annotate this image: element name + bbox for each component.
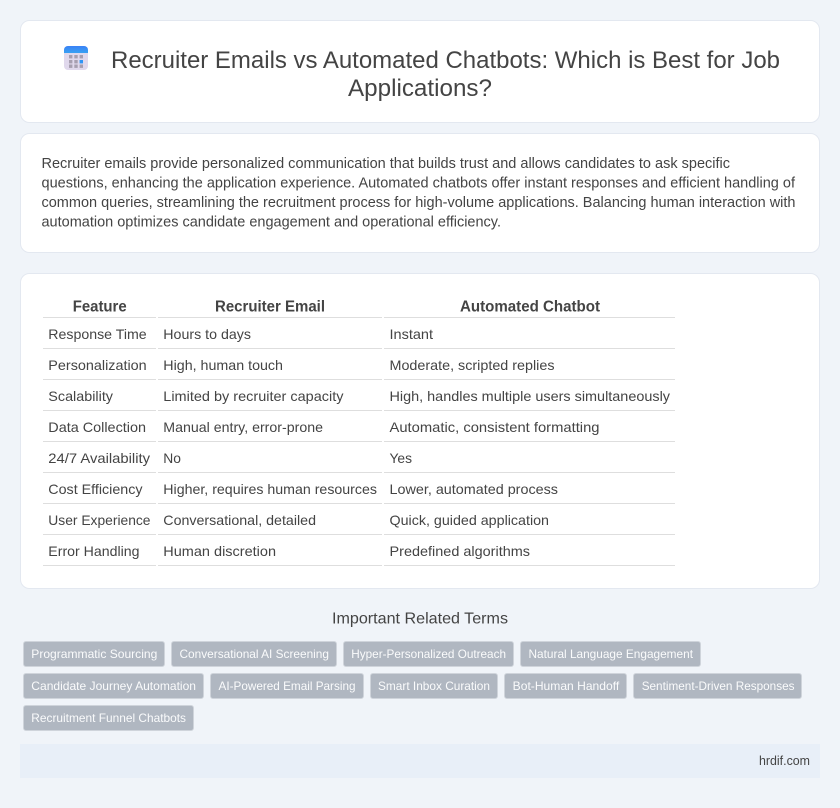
tag bbox=[344, 642, 514, 666]
tag: Conversational AI Screening bbox=[180, 647, 329, 661]
panel: title bbox=[20, 20, 820, 122]
panel: comparison table bbox=[20, 274, 820, 588]
tag: Natural Language Engagement bbox=[528, 647, 694, 661]
tag: Hyper-Personalized Outreach bbox=[351, 647, 506, 661]
panel: introduction text: Recruiter emails provide personalized communication that builds trust and allows candidates to ask specific bbox=[42, 156, 730, 172]
panel: introduction text: automation optimizes candidate engagement and operational efficiency. bbox=[42, 214, 501, 230]
tag bbox=[370, 674, 498, 698]
table header: Feature bbox=[73, 299, 127, 316]
row: personalization bbox=[48, 357, 555, 373]
row: data collection: Automatic, consistent formatting bbox=[390, 419, 600, 435]
row: cost efficiency: Cost Efficiency bbox=[48, 481, 142, 497]
tag bbox=[210, 674, 364, 698]
tag bbox=[24, 706, 194, 730]
row: error handling: Predefined algorithms bbox=[390, 543, 530, 559]
row: scalability: High, handles multiple users simultaneously bbox=[390, 388, 670, 404]
tag bbox=[520, 642, 700, 666]
row: user experience: Conversational, detailed bbox=[163, 512, 316, 528]
tag: Smart Inbox Curation bbox=[378, 679, 490, 693]
tag: Recruitment Funnel Chatbots bbox=[31, 711, 186, 725]
heading: Applications? bbox=[348, 75, 492, 102]
panel: introduction text bbox=[20, 134, 820, 252]
tag: Candidate Journey Automation bbox=[31, 679, 196, 693]
row: error handling bbox=[48, 543, 530, 559]
footer bbox=[20, 744, 820, 778]
row: user experience: User Experience bbox=[48, 512, 151, 528]
icon: calendar bbox=[64, 46, 88, 70]
panel: introduction text: questions, enhancing the application experience. Automated chatbots offer instant responses and efficient handling of bbox=[42, 176, 796, 192]
heading: Recruiter Emails vs Automated Chatbots: Which is Best for Job bbox=[111, 47, 780, 74]
panel: related term tags bbox=[24, 642, 802, 730]
row: availability bbox=[48, 450, 412, 466]
tag bbox=[634, 674, 802, 698]
row: response time bbox=[48, 326, 433, 342]
row: user experience: Quick, guided application bbox=[390, 512, 549, 528]
row: cost efficiency bbox=[48, 481, 558, 497]
row: cost efficiency: Higher, requires human resources bbox=[163, 481, 377, 497]
tag bbox=[172, 642, 336, 666]
row: scalability: Scalability bbox=[48, 388, 113, 404]
row: availability: Yes bbox=[390, 450, 412, 466]
tag: Programmatic Sourcing bbox=[31, 647, 157, 661]
row: scalability bbox=[48, 388, 670, 404]
row: user experience bbox=[48, 512, 549, 528]
table header: Recruiter Email bbox=[215, 299, 325, 316]
row: data collection bbox=[48, 419, 600, 435]
row: response time: Instant bbox=[390, 326, 433, 342]
heading: related terms: Important Related Terms bbox=[332, 610, 508, 628]
row: personalization: Personalization bbox=[48, 357, 147, 373]
table header bbox=[73, 299, 601, 316]
row: cost efficiency: Lower, automated process bbox=[390, 481, 558, 497]
row: error handling: Error Handling bbox=[48, 543, 139, 559]
row: error handling: Human discretion bbox=[163, 543, 276, 559]
tag bbox=[24, 674, 204, 698]
row: response time: Response Time bbox=[48, 326, 147, 342]
row: data collection: Data Collection bbox=[48, 419, 146, 435]
row: scalability: Limited by recruiter capacity bbox=[163, 388, 344, 404]
tag: Sentiment-Driven Responses bbox=[642, 679, 794, 693]
row: response time: Hours to days bbox=[163, 326, 251, 342]
row: availability: 24/7 Availability bbox=[48, 450, 150, 466]
row: availability: No bbox=[163, 450, 181, 466]
tag: Bot-Human Handoff bbox=[513, 679, 620, 693]
row: data collection: Manual entry, error-prone bbox=[163, 419, 323, 435]
footer: hrdif.com bbox=[759, 753, 810, 768]
heading bbox=[111, 47, 780, 102]
tag bbox=[24, 642, 164, 666]
tag: AI-Powered Email Parsing bbox=[218, 679, 356, 693]
row: personalization: High, human touch bbox=[163, 357, 283, 373]
tag bbox=[504, 674, 626, 698]
table header: Automated Chatbot bbox=[460, 299, 601, 316]
row: personalization: Moderate, scripted replies bbox=[390, 357, 554, 373]
panel: introduction text: common queries, streamlining the recruitment process for high-volume applications. Balancing human interaction with bbox=[42, 195, 796, 211]
